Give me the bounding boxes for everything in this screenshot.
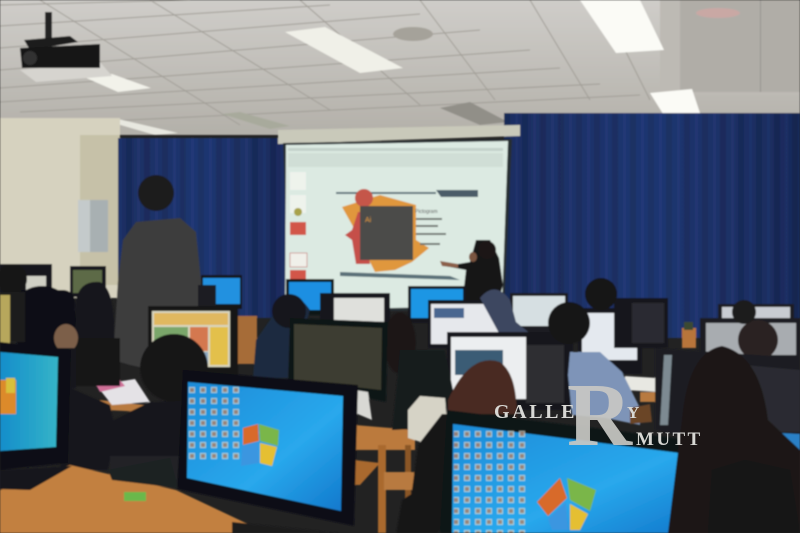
- presenter: [440, 240, 503, 305]
- watermark: Y: [627, 403, 639, 422]
- slide thumbnails: [290, 172, 307, 280]
- curtains: [118, 113, 800, 338]
- left wall person: [0, 264, 27, 343]
- chair front: [108, 458, 178, 488]
- slide artwork: Ai: [365, 217, 372, 224]
- ceiling: [0, 0, 800, 135]
- monitor: photo editing center right: [447, 332, 573, 410]
- monitor: dark center: [288, 318, 388, 420]
- monitor: colourful slide left: [148, 306, 238, 378]
- right dark monitor: [655, 348, 800, 460]
- front desk: [0, 465, 250, 533]
- watermark: R: [567, 366, 633, 465]
- student back of head centre: [396, 360, 517, 533]
- slide artwork: Pictogram: [415, 209, 438, 215]
- desktop icons: [186, 385, 240, 463]
- back wall left: [0, 118, 120, 298]
- woman front right: [668, 346, 800, 533]
- left teacher standing: [113, 175, 202, 375]
- windows logo: [241, 424, 279, 466]
- slide artwork: [336, 189, 478, 280]
- slide ribbon: [288, 148, 503, 167]
- watermark: GALLE: [494, 401, 577, 423]
- watermark: MUTT: [636, 429, 703, 450]
- back row monitors: [0, 264, 800, 374]
- ceiling projector: [20, 12, 112, 82]
- backpack and bag: [392, 350, 454, 445]
- person blue shirt: [548, 302, 652, 425]
- watermark: [494, 366, 703, 465]
- projection screen: [278, 125, 520, 312]
- desks back: [96, 316, 660, 533]
- mid row people: [72, 278, 778, 386]
- desktop icons: [454, 428, 530, 533]
- student left front: [5, 286, 116, 470]
- student mid-left: [110, 334, 214, 486]
- front centre monitor: [177, 370, 358, 533]
- ceiling lights: [84, 0, 701, 135]
- front left monitor: [0, 342, 72, 490]
- windows logo: [537, 478, 596, 530]
- front right monitor: [440, 410, 708, 533]
